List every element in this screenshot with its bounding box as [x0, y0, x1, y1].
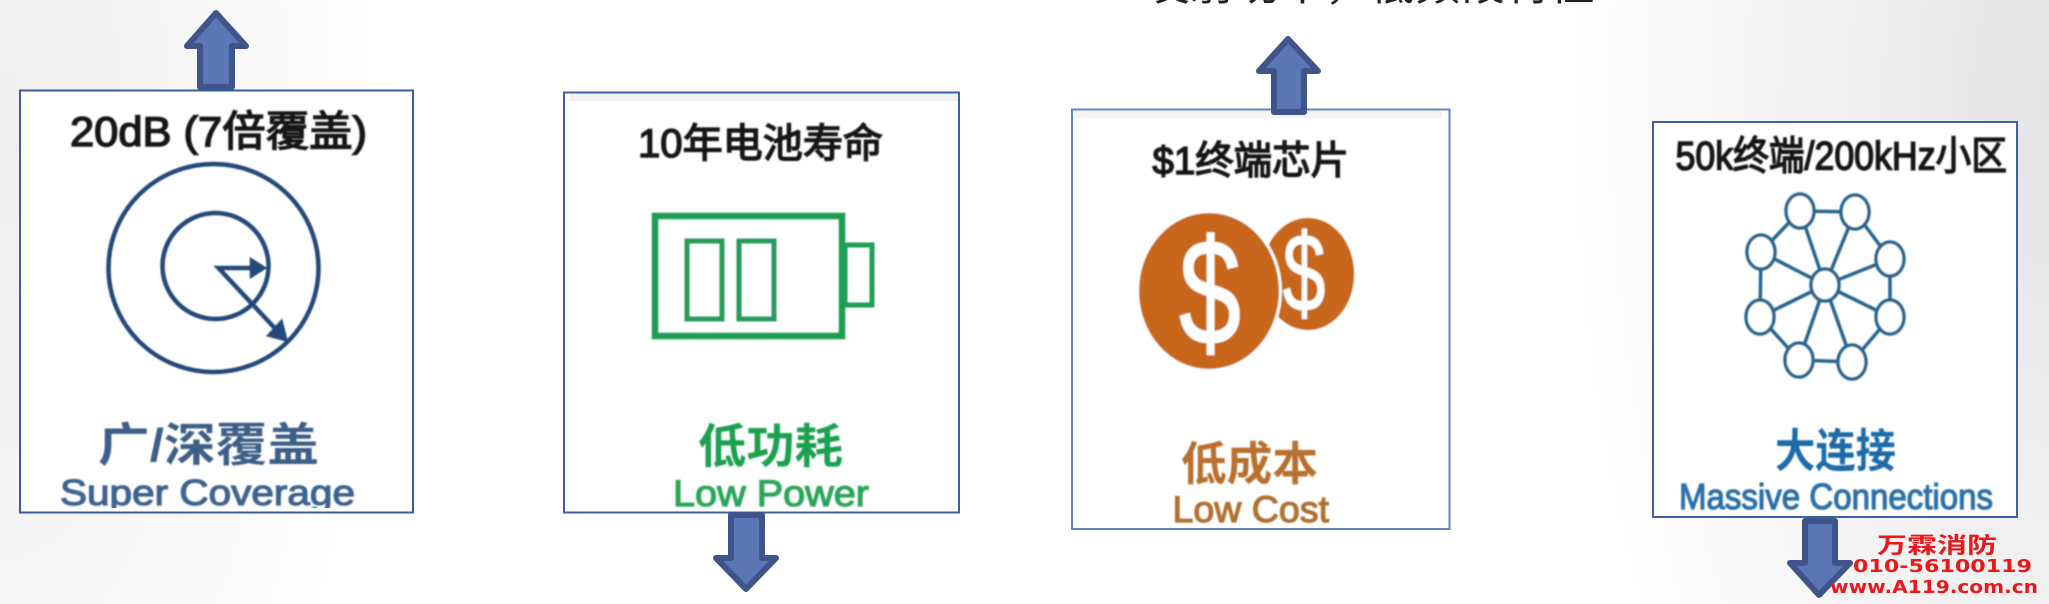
watermark: company name and contact — [1830, 533, 2038, 598]
arrow: up from super coverage — [187, 13, 246, 87]
icon: dollar coins: $ — [1283, 213, 1325, 335]
arrow: up from low cost — [1259, 39, 1318, 112]
connection density text: 50k终端/200kHz小区 — [1676, 134, 2007, 178]
panel: super coverage — [20, 90, 413, 513]
chip price text: $1终端芯片 — [1152, 140, 1349, 183]
english title: massive connections: Massive Connections — [1679, 476, 1993, 517]
chinese title: wide and deep coverage: 广/深覆盖 — [98, 419, 319, 471]
chinese title: low cost: 低成本 — [1181, 438, 1318, 490]
icon: battery — [655, 216, 872, 336]
icon: dollar coins — [1136, 209, 1354, 376]
english title: super coverage: Super Coverage — [60, 472, 355, 513]
coverage spec text: 20dB (7倍覆盖) — [70, 108, 367, 155]
chinese title: low power: 低功耗 — [698, 420, 843, 473]
company name: 万霖消防 — [1877, 533, 1997, 558]
battery life text: 10年电池寿命 — [638, 122, 883, 166]
panel: massive connections — [1653, 122, 2017, 517]
panel: low power — [564, 92, 959, 514]
arrow: down from massive connections — [1790, 521, 1850, 595]
panel: low cost — [1072, 110, 1450, 530]
icon: coverage circles — [108, 164, 318, 372]
icon: dollar coins: $ — [1179, 209, 1241, 376]
icon: star mesh network — [1746, 194, 1904, 379]
english title: low cost: Low Cost — [1172, 489, 1330, 530]
website: www.A119.com.cn — [1830, 577, 2038, 598]
phone number: 010-56100119 — [1853, 556, 2032, 577]
chinese title: massive connections: 大连接 — [1775, 425, 1896, 477]
arrow: down from low power — [716, 515, 776, 589]
english title: low power: Low Power — [673, 473, 869, 514]
